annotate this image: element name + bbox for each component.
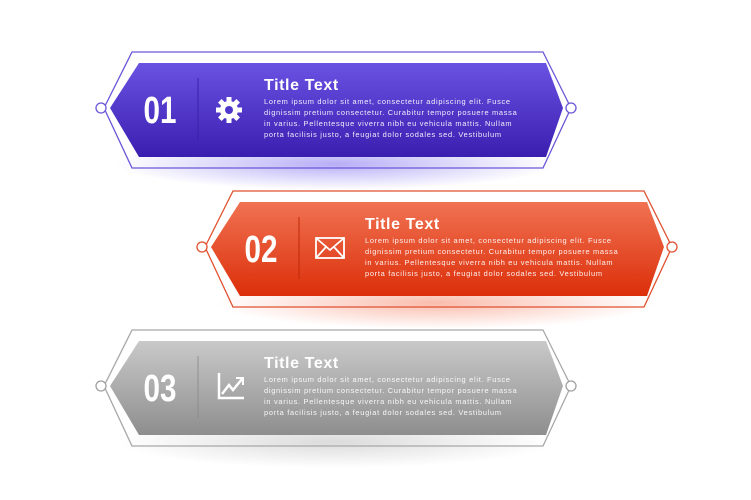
text block 01: Lorem ipsum dolor sit amet, consectetur adipiscing elit. Fusce — [264, 97, 511, 106]
text block 02 — [365, 216, 619, 278]
icon: growth chart — [219, 373, 244, 398]
text block 03: porta facilisis justo, a feugiat dolor sodales sed. Vestibulum — [264, 408, 502, 417]
panel 01 — [96, 52, 576, 190]
text block 02: porta facilisis justo, a feugiat dolor sodales sed. Vestibulum — [365, 269, 603, 278]
text block 03: in varius. Pellentesque viverra nibh eu vehicula mattis. Nullam — [264, 397, 512, 406]
text block 01: Title Text — [264, 77, 339, 94]
number 02: 02 — [245, 229, 277, 271]
number 03: 03 — [144, 368, 176, 410]
text block 02: in varius. Pellentesque viverra nibh eu vehicula mattis. Nullam — [365, 258, 613, 267]
text block 03 — [264, 355, 518, 417]
text block 02: Lorem ipsum dolor sit amet, consectetur adipiscing elit. Fusce — [365, 236, 612, 245]
text block 02: Title Text — [365, 216, 440, 233]
icon: gear — [216, 97, 242, 123]
text block 01 — [264, 77, 518, 139]
text block 01: porta facilisis justo, a feugiat dolor sodales sed. Vestibulum — [264, 130, 502, 139]
panel 03 — [96, 330, 576, 468]
text block 01: dignissim pretium consectetur. Curabitur tempor posuere massa — [264, 108, 518, 117]
number 01: 01 — [144, 90, 176, 132]
text block 03: Title Text — [264, 355, 339, 372]
icon: envelope — [316, 238, 344, 258]
text block 01: in varius. Pellentesque viverra nibh eu vehicula mattis. Nullam — [264, 119, 512, 128]
text block 03: Lorem ipsum dolor sit amet, consectetur adipiscing elit. Fusce — [264, 375, 511, 384]
panel 02 — [197, 191, 677, 329]
text block 03: dignissim pretium consectetur. Curabitur tempor posuere massa — [264, 386, 518, 395]
text block 02: dignissim pretium consectetur. Curabitur tempor posuere massa — [365, 247, 619, 256]
